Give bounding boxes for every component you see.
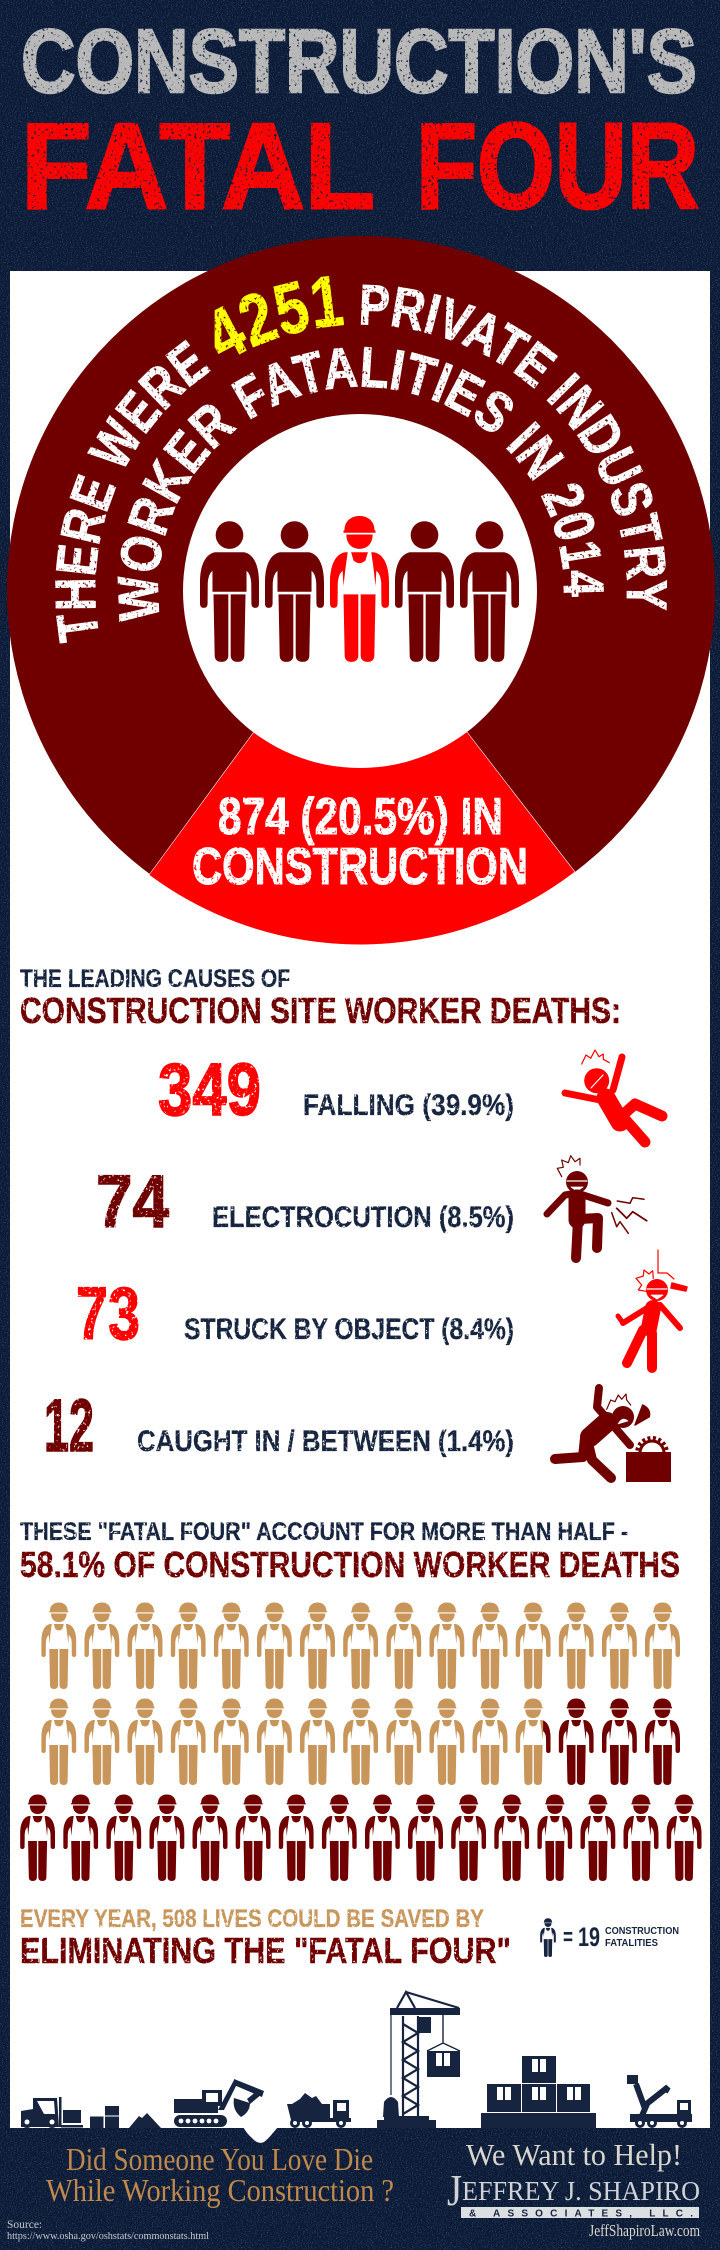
- cause: electrocution: [96, 1160, 514, 1243]
- donut segment: construction share: [149, 732, 575, 945]
- icon: excavator: [174, 2079, 264, 2127]
- illustration: construction site silhouettes: [21, 1992, 692, 2128]
- icon: five workers, one in four highlighted: [200, 516, 519, 662]
- icon: tower crane with hanging container: [377, 1992, 460, 2128]
- fatal four share heading: [20, 1518, 680, 1585]
- cause: caught in or between: [44, 1384, 514, 1467]
- law firm logo: [447, 2166, 700, 2220]
- source citation: Source:: [7, 2219, 42, 2231]
- curved heading text: WORKER FATALITIES IN 2014: [118, 346, 604, 622]
- cause: struck by object: [76, 1272, 514, 1355]
- help message: We Want to Help!: [466, 2137, 682, 2172]
- cause: caught in or between: 12: [44, 1384, 94, 1467]
- pictogram chart: workers row 2: [41, 1698, 680, 1788]
- causes heading: THE LEADING CAUSES OF: [20, 965, 290, 993]
- construction share label: [192, 788, 528, 896]
- curved heading text: THERE WERE 4251 PRIVATE INDUSTRY: [55, 276, 668, 644]
- title: [21, 12, 699, 234]
- cause: falling: FALLING (39.9%): [303, 1089, 514, 1122]
- source citation: [7, 2219, 209, 2242]
- construction share label: CONSTRUCTION: [192, 838, 528, 896]
- excavation pit in the ground: [236, 2127, 278, 2143]
- icon: forklift: [21, 2097, 83, 2128]
- icon: dump truck: [287, 2093, 351, 2128]
- donut chart: 4251 private industry fatalities: [7, 236, 715, 945]
- law firm logo: EFFREY J. SHAPIRO: [462, 2176, 700, 2206]
- legend: one figure equals 19 fatalities: =: [563, 1924, 573, 1951]
- construction share label: 874 (20.5%) IN: [218, 788, 503, 846]
- cause: falling: [158, 1048, 514, 1131]
- lives saved heading: EVERY YEAR, 508 LIVES COULD BE SAVED BY: [20, 1905, 484, 1933]
- cause: electrocution: 74: [96, 1160, 169, 1243]
- cause: struck by object: STRUCK BY OBJECT (8.4%): [184, 1313, 514, 1346]
- law firm logo: J: [447, 2166, 462, 2215]
- cause: struck by object: 73: [76, 1272, 140, 1355]
- icon: electrocuted worker: [547, 1156, 647, 1258]
- icon: falling worker: [565, 1050, 662, 1142]
- pictogram chart: workers row 1: [41, 1602, 680, 1689]
- cause: falling: 349: [158, 1048, 261, 1131]
- legend: one figure equals 19 fatalities: 19: [578, 1922, 600, 1952]
- call to action question: Did Someone You Love Die: [66, 2141, 373, 2177]
- icon: worker struck by object: [618, 1250, 687, 1368]
- causes heading: [20, 965, 621, 1031]
- pictogram chart: workers row 3: [20, 1794, 702, 1881]
- legend: one figure equals 19 fatalities: CONSTRUCTION: [605, 1925, 679, 1937]
- title: FATAL: [21, 98, 375, 234]
- call to action question: While Working Construction ?: [46, 2172, 394, 2208]
- causes heading: CONSTRUCTION SITE WORKER DEATHS:: [20, 990, 621, 1031]
- icon: stacked crates: [90, 2106, 119, 2128]
- source citation: https://www.osha.gov/oshstats/commonstats.html: [7, 2230, 209, 2242]
- cause: caught in or between: CAUGHT IN / BETWEEN (1.4%): [137, 1425, 514, 1458]
- call to action question: [46, 2141, 394, 2208]
- icon: boom lift truck: [627, 2075, 692, 2128]
- cause: electrocution: ELECTROCUTION (8.5%): [212, 1201, 514, 1234]
- lives saved heading: [20, 1905, 511, 1971]
- icon: rubble pile: [129, 2113, 161, 2128]
- icon: worker caught in machine: [555, 1388, 671, 1482]
- legend: one figure equals 19 fatalities: [540, 1918, 679, 1957]
- fatal four share heading: THESE "FATAL FOUR" ACCOUNT FOR MORE THAN HALF -: [20, 1518, 628, 1546]
- lives saved heading: ELIMINATING THE "FATAL FOUR": [20, 1930, 511, 1971]
- law firm logo: & ASSOCIATES, LLC.: [469, 2208, 693, 2220]
- legend: one figure equals 19 fatalities: FATALITIES: [605, 1937, 658, 1949]
- icon: stacked container building: [481, 2056, 596, 2128]
